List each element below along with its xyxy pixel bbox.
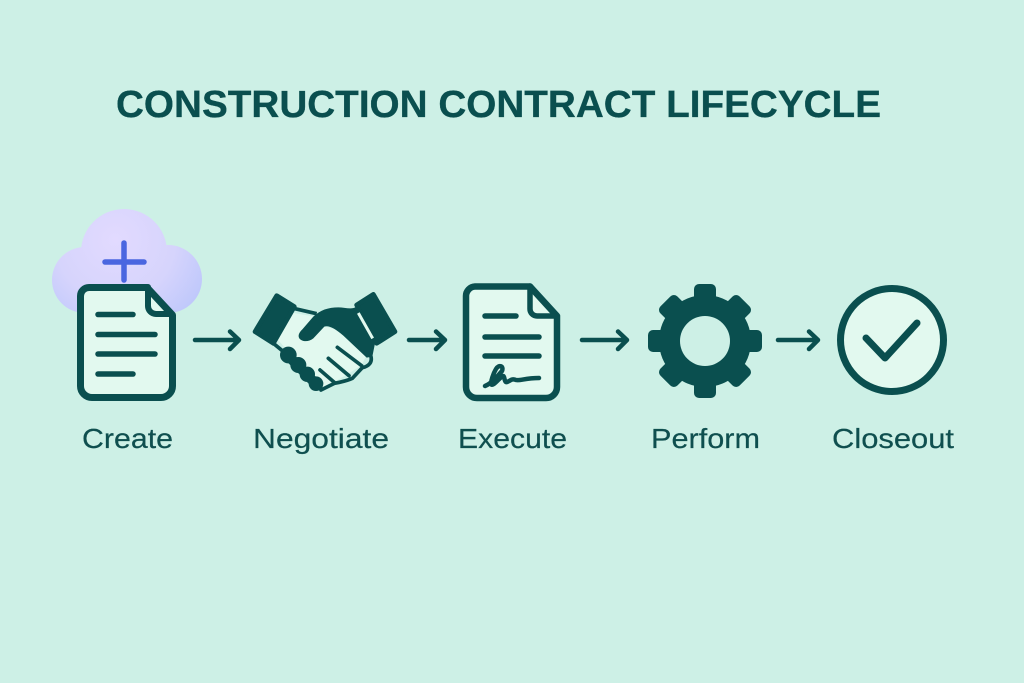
step: Negotiate — [253, 294, 395, 454]
title: CONSTRUCTION CONTRACT LIFECYCLE — [116, 84, 881, 126]
label: Negotiate: Negotiate — [253, 423, 389, 454]
label: Execute: Execute — [458, 423, 567, 454]
icon: check circle — [840, 288, 944, 392]
icon: handshake — [255, 294, 395, 391]
step: Execute — [458, 286, 567, 454]
step: Closeout — [832, 288, 954, 454]
label: Perform: Perform — [651, 423, 760, 454]
icon: cloud with plus — [52, 209, 202, 313]
icon: gear — [648, 284, 762, 398]
arrow — [778, 332, 818, 349]
arrow — [409, 332, 445, 349]
step: Perform — [648, 284, 762, 454]
arrow — [195, 332, 239, 349]
step: Create — [52, 209, 202, 454]
label: Closeout: Closeout — [832, 423, 954, 454]
icon: document — [80, 287, 172, 398]
label: Create: Create — [82, 423, 173, 454]
arrow — [582, 332, 627, 349]
icon: signed document — [466, 286, 557, 398]
